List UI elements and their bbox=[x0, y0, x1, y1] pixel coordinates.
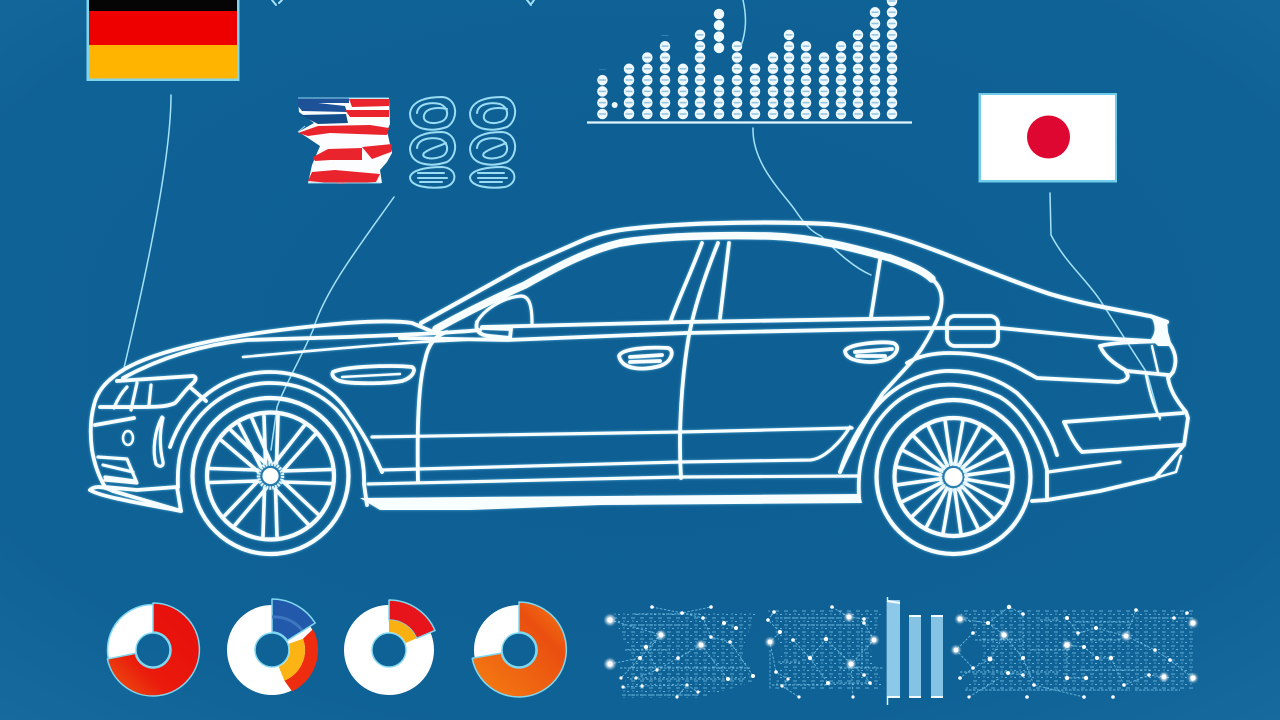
car body outline bbox=[90, 243, 862, 511]
flag: Japan bbox=[978, 93, 1117, 182]
center bars bbox=[887, 597, 943, 705]
roof and windows bbox=[400, 223, 1167, 472]
rear wheel bbox=[876, 400, 1030, 554]
front wheel bbox=[192, 398, 348, 554]
donut 1 bbox=[107, 603, 199, 696]
donut 3 bbox=[358, 600, 435, 681]
network texture bbox=[612, 610, 1194, 698]
car line drawing bbox=[90, 223, 1188, 554]
network glow nodes bbox=[605, 605, 1197, 699]
flag: Germany bbox=[86, 0, 240, 81]
bar chart: dotted columns bbox=[587, 0, 912, 122]
rear body bbox=[840, 315, 1188, 501]
network data pattern bbox=[605, 605, 1197, 699]
door handles and fuel door bbox=[619, 316, 998, 369]
chart baseline bbox=[587, 121, 912, 124]
donut 2 bbox=[241, 599, 318, 691]
donut 4 bbox=[472, 602, 566, 697]
donut charts bbox=[107, 599, 566, 697]
icon grid: spirals bbox=[410, 97, 515, 188]
flag: USA sketch bbox=[298, 98, 392, 184]
leader lines bbox=[123, 0, 1160, 450]
